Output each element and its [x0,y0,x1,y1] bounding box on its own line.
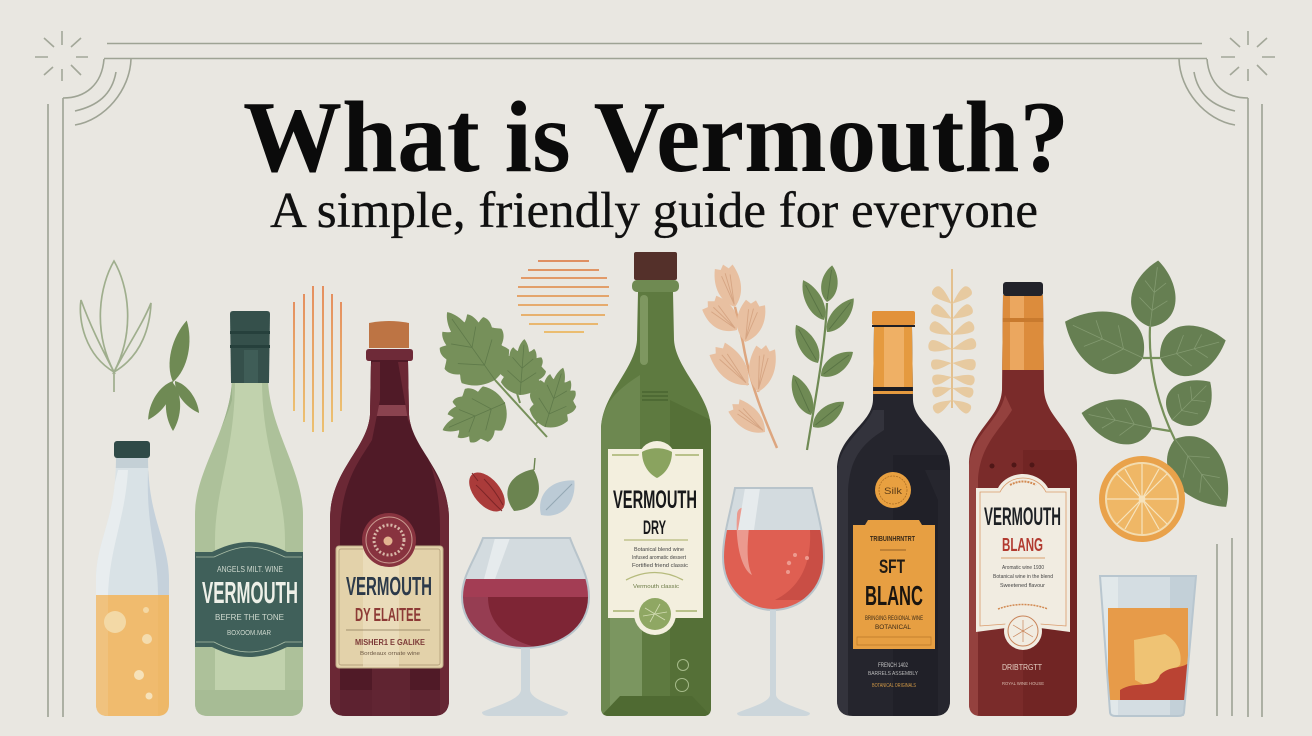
icon: outline leaf [80,261,151,392]
label [976,474,1070,632]
neck capsule [230,311,270,383]
label [608,449,703,618]
stem and foot [482,648,568,716]
bottle: green dry: DRY [643,518,666,539]
bottle: red blanc: ROYAL WINE HOUSE [1002,681,1044,686]
bottle: black [837,311,950,720]
bottle: red blanc: Aromatic wine 1930 [1002,565,1044,571]
bottle: black: BARRELS ASSEMBLY [868,671,918,677]
cap [1003,282,1043,296]
bottle: pale green: BOXOOM.MAR [227,630,271,637]
title: What is Vermouth? [243,81,1069,194]
bottle: clear with amber liquid [96,441,169,716]
icon: small green sprig [143,319,204,431]
stem and foot [737,610,810,716]
wine glass: rose red [720,488,830,716]
bottle: green dry: Botanical blend wine [634,547,684,553]
icon: parsley sprig [419,292,586,457]
bottle: black: TRIBUINHRNTRT [870,534,915,543]
icon: vertical orange lines [293,286,342,432]
bottle: black: BRINGING REGIONAL WINE [865,616,923,622]
bottle: red blanc: BLANG [1002,535,1043,555]
icon: spice pods [462,458,584,524]
cap [872,311,915,325]
top seal [638,441,676,479]
bottle: green dry [601,252,711,720]
liquid [96,595,169,716]
bottle: black: BOTANICAL ORIGINALS [872,683,917,689]
label [853,520,935,649]
cork [369,321,409,348]
bottom seal [634,593,676,635]
bottle: black: BOTANICAL [875,625,912,631]
bottle: burgundy [330,321,450,720]
icon: green sprig [785,264,860,450]
bottle: pale green [195,311,303,716]
label [336,546,443,668]
tumbler glass [1100,576,1196,716]
icon: left sunburst [35,31,88,81]
bottle: red blanc: VERMOUTH [984,503,1061,531]
icon: sage branch [1052,258,1247,523]
bottle: burgundy: VERMOUTH [346,571,432,601]
bottle: green dry: Fortified friend classic [632,563,688,569]
bottle: pale green: BEFRE THE TONE [215,613,284,622]
cap [634,252,677,280]
seal [362,513,416,567]
bottle: pale green: ANGELS MILT. WINE [217,565,283,574]
wine glass: deep red [455,538,595,716]
subtitle: A simple, friendly guide for everyone [270,183,1038,239]
bottle: burgundy: MISHER1 E GALIKE [355,638,426,647]
cap [114,441,150,458]
icon: orange slice [1099,456,1185,542]
bottle: pale green: VERMOUTH [202,575,298,610]
icon: wheat sprig [928,269,977,415]
bottle: green dry: Vermouth classic [633,584,679,590]
label band [195,542,303,657]
bottle: red blanc [969,282,1077,720]
icon: peach sprig [698,261,778,448]
bottle: red blanc: Botanical wine in the blend [993,574,1053,580]
bottle: burgundy: Bordeaux ornate wine [360,651,420,657]
bottle: black: BLANC [865,580,923,611]
bottle: green dry: VERMOUTH [613,486,697,514]
bottle: black: SFT [879,557,905,578]
seal [875,472,911,508]
icon: right sunburst [1221,31,1275,81]
liquid [1108,608,1188,700]
icon: striped circle [517,261,609,332]
bottle: black: FRENCH 1402 [878,662,908,669]
bottle: green dry: Infused aromatic dessert [632,555,686,561]
bottle: black: Silk [884,486,903,496]
bottle: red blanc: Sweetened flavour [1000,583,1045,589]
seal [1004,612,1042,650]
bottle: burgundy: DY ELAITEE [355,605,421,625]
bottle: red blanc: DRIBTRGTT [1002,662,1042,672]
